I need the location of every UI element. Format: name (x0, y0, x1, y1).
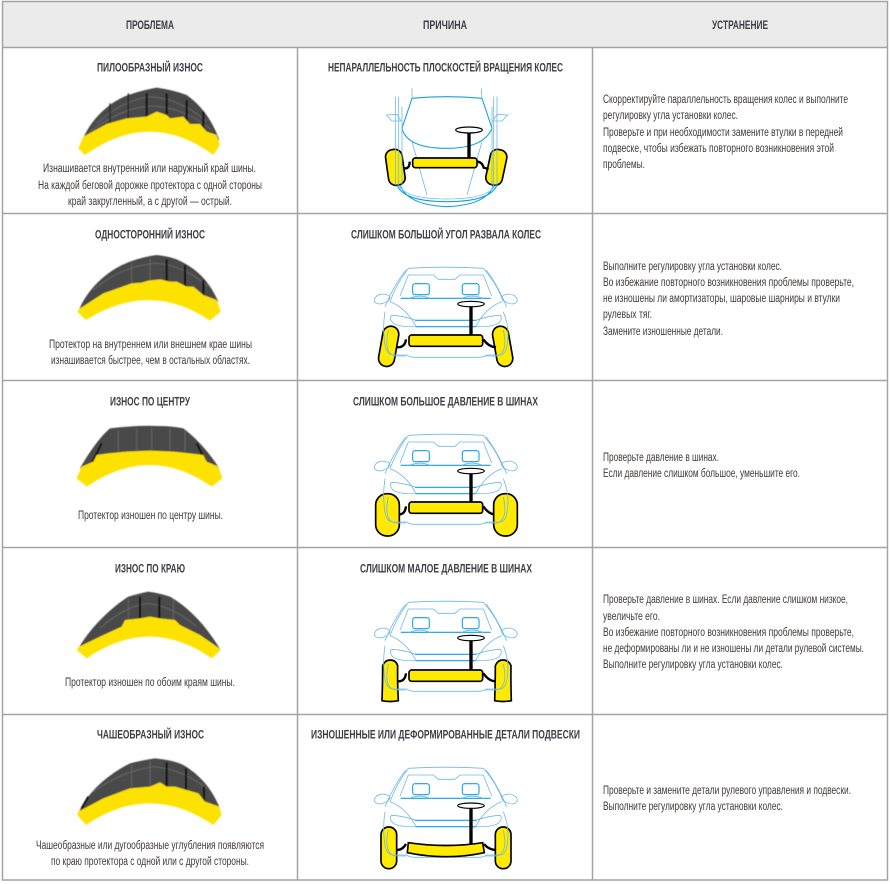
icon: tire cupping (77, 758, 222, 825)
panel: row 3 remedy: Если давление слишком большое, уменьшите его. (603, 468, 800, 480)
panel: row 3 problem (77, 394, 223, 522)
panel: row 4 problem (65, 562, 235, 689)
heading: misaligned planes: НЕПАРАЛЛЕЛЬНОСТЬ ПЛОСКОСТЕЙ ВРАЩЕНИЯ КОЛЕС (328, 60, 563, 74)
column headings: УСТРАНЕНИЕ (712, 18, 768, 32)
panel: row 2 cause (351, 226, 541, 368)
icon: tire sawtooth (78, 88, 220, 155)
header band (2, 2, 888, 48)
panel: row 5 remedy: Выполните регулировку угла установки колес. (603, 801, 783, 813)
description: Чашеобразные или дугообразные углубления появляются (36, 840, 264, 852)
description (49, 339, 252, 367)
panel: row 1 problem (38, 60, 262, 208)
panel: row 3 remedy: Проверьте давление в шинах. (603, 452, 719, 464)
icon: tire center wear (77, 426, 222, 487)
icon: car with flat wheels (374, 601, 517, 701)
panel: row 2 remedy: Выполните регулировку угла установки колес. (603, 261, 782, 273)
panel: row 3 remedy (603, 452, 800, 480)
description: край закругленный, а с другой — острый. (68, 196, 232, 208)
heading: center wear: ИЗНОС ПО ЦЕНТРУ (110, 394, 190, 408)
heading: pressure too low: СЛИШКОМ МАЛОЕ ДАВЛЕНИЕ В ШИНАХ (360, 562, 532, 576)
description: по краю протектора с одной или с другой стороны. (51, 856, 249, 868)
panel: row 2 remedy: рулевых тяг. (603, 309, 652, 321)
description: Протектор на внутреннем или внешнем крае шины (49, 339, 252, 351)
column headings: ПРОБЛЕМА (126, 18, 174, 32)
panel: row 5 cause (311, 728, 580, 869)
panel: row 3 cause (353, 394, 538, 536)
description (38, 163, 262, 208)
panel: row 5 problem (36, 726, 264, 868)
description: Изнашивается внутренний или наружный край шины. (43, 163, 256, 175)
icon: tire edge wear (77, 592, 221, 658)
heading: edge wear: ИЗНОС ПО КРАЮ (115, 562, 185, 576)
panel: row 1 remedy: проблемы. (603, 159, 645, 171)
panel: row 4 remedy: увеличьте его. (603, 611, 660, 623)
heading: too much camber: СЛИШКОМ БОЛЬШОЙ УГОЛ РАЗВАЛА КОЛЕС (351, 226, 541, 242)
panel: row 1 remedy (603, 94, 848, 171)
heading: sawtooth wear: ПИЛООБРАЗНЫЙ ИЗНОС (97, 60, 203, 74)
panel: row 4 remedy: Выполните регулировку угла установки колес. (603, 659, 783, 671)
panel: row 2 problem (49, 226, 252, 367)
column headings: ПРИЧИНА (423, 18, 467, 32)
description: Протектор изношен по обоим краям шины. (65, 677, 235, 689)
heading: cupping wear: ЧАШЕОБРАЗНЫЙ ИЗНОС (97, 726, 204, 742)
icon: tire one-sided (77, 255, 221, 321)
icon: car top view (385, 88, 508, 207)
panel: row 2 remedy: Замените изношенные детали. (603, 326, 723, 338)
description (36, 840, 264, 868)
icon: car with cambered wheels (374, 267, 517, 368)
panel: row 4 cause (360, 562, 532, 701)
panel: row 4 remedy (603, 594, 864, 671)
heading: one-sided wear: ОДНОСТОРОННИЙ ИЗНОС (95, 226, 205, 242)
icon: car with bent axle (374, 767, 517, 869)
panel: row 1 remedy: регулировку угла установки колес. (603, 110, 738, 122)
icon: car with bulging wheels (374, 434, 517, 536)
panel: row 1 cause (328, 60, 563, 207)
panel: row 2 remedy (603, 261, 854, 338)
description: изнашивается быстрее, чем в остальных областях. (51, 355, 250, 367)
column headings (126, 18, 768, 32)
description: На каждой беговой дорожке протектора с одной стороны (38, 180, 262, 192)
panel: row 5 remedy (603, 785, 851, 813)
heading: worn suspension parts: ИЗНОШЕННЫЕ ИЛИ ДЕФОРМИРОВАННЫЕ ДЕТАЛИ ПОДВЕСКИ (311, 728, 580, 742)
description: Протектор изношен по центру шины. (78, 510, 223, 522)
heading: pressure too high: СЛИШКОМ БОЛЬШОЕ ДАВЛЕНИЕ В ШИНАХ (353, 394, 538, 408)
